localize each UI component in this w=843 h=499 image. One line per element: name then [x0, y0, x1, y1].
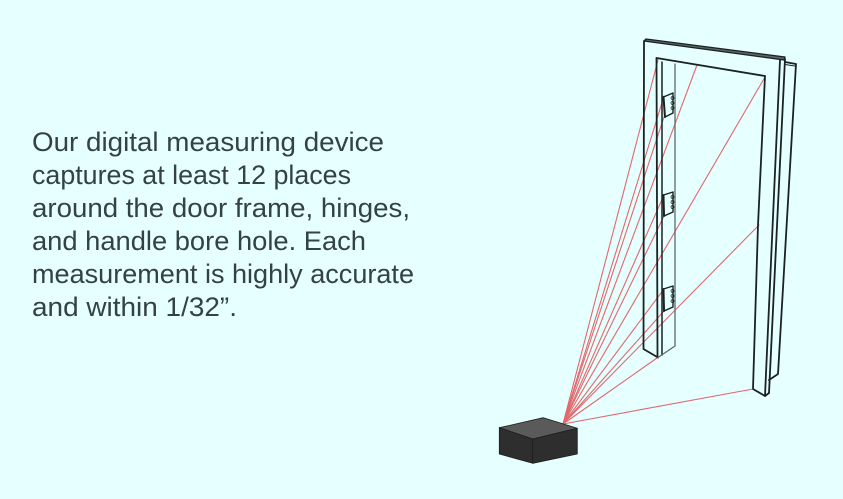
- text block: device description: captures at least 12 places: [32, 160, 351, 190]
- frame: rear side trim: [769, 62, 796, 380]
- door frame illustration: [644, 39, 796, 396]
- text block: device description: measurement is highly accurate: [32, 259, 414, 289]
- hinge: bottom: [664, 286, 674, 311]
- text block: device description: [32, 127, 414, 322]
- text block: device description: and handle bore hole. Each: [32, 226, 366, 256]
- frame: door stop: [658, 62, 675, 358]
- frame: outer casing: [644, 39, 785, 396]
- hinge: middle: [664, 192, 674, 216]
- text block: device description: around the door frame, hinges,: [32, 193, 410, 223]
- text block: device description: and within 1/32”.: [32, 292, 237, 322]
- laser measurement rays: [563, 60, 765, 424]
- measuring device box: [499, 418, 577, 463]
- text block: device description: Our digital measuring device: [32, 127, 384, 157]
- hinge: top: [664, 93, 674, 117]
